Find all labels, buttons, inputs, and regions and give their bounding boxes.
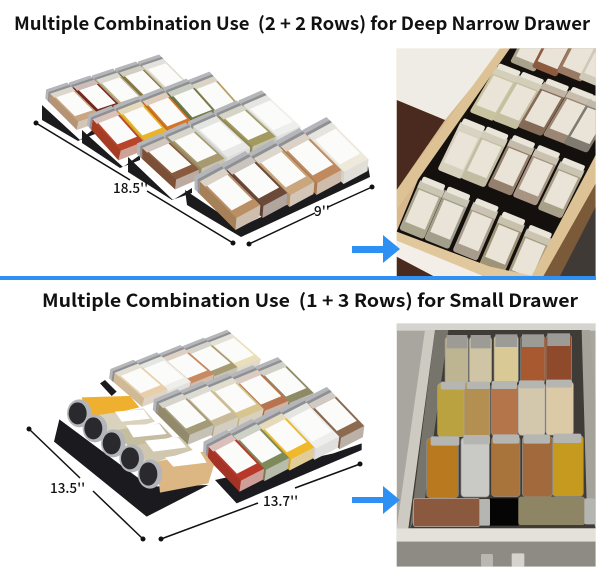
third row jars	[427, 436, 583, 498]
jars lying on left tray	[67, 396, 214, 493]
jars row 3	[129, 90, 308, 189]
wood rails	[397, 48, 510, 210]
dimension: 13.7 inch	[158, 462, 362, 542]
dimension: 13.5 inch	[26, 426, 146, 542]
dimension: 9 inch	[246, 184, 374, 246]
jars row 2	[80, 72, 247, 160]
lying jars	[413, 498, 480, 527]
arrow: bottom	[352, 486, 400, 514]
title: bottom section: Multiple Combination Use (1 + 3 Rows) for Small Drawer	[42, 287, 578, 313]
second row caps	[441, 380, 572, 390]
jars front row	[195, 387, 371, 492]
third row caps	[431, 434, 581, 446]
dimension: 18.5 inch: 18.5''	[113, 177, 148, 197]
photo: small drawer	[397, 323, 596, 567]
dimension: 9 inch: 9''	[314, 200, 330, 220]
drawer front and handles	[397, 528, 596, 542]
jars row 1	[39, 54, 197, 130]
dimension: 18.5 inch	[34, 120, 236, 246]
jars	[510, 48, 547, 72]
divider	[0, 276, 596, 280]
dimension: 13.5 inch: 13.5''	[50, 477, 85, 497]
jars back row	[102, 330, 267, 407]
product image: 1 + 3 rows organizer	[54, 330, 371, 517]
black trays	[42, 105, 370, 237]
arrow: top	[352, 235, 400, 263]
product image: 2 + 2 rows organizer	[39, 54, 376, 237]
jars row 4	[186, 117, 376, 230]
dimension: 13.7 inch: 13.7''	[263, 490, 298, 510]
photo: deep narrow drawer	[396, 48, 596, 276]
top row jars	[445, 335, 572, 383]
jars middle row	[145, 357, 320, 445]
trays	[54, 380, 362, 517]
second row jars	[438, 382, 573, 437]
top row shoulders	[447, 333, 570, 348]
title: top section: Multiple Combination Use (2 + 2 Rows) for Deep Narrow Drawer	[14, 10, 590, 36]
